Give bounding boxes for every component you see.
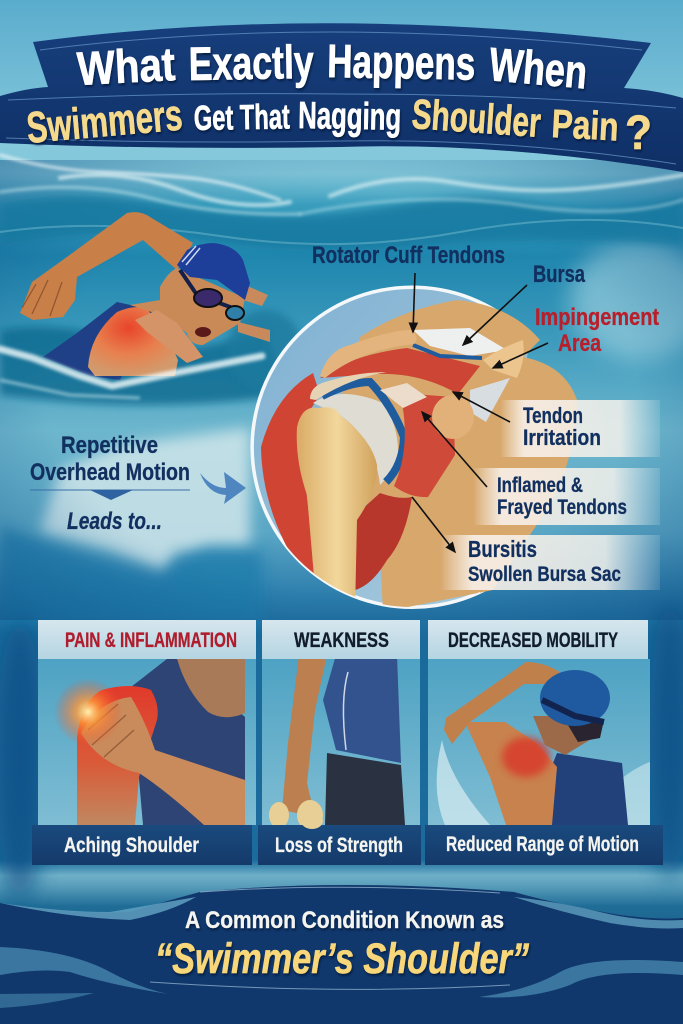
cap stripes: [182, 246, 200, 265]
deltoid muscle: [261, 373, 318, 575]
bottom subtitle: A Common Condition Known as: [185, 907, 504, 934]
title line 2: [25, 90, 652, 160]
redness: [502, 737, 550, 777]
lower acromion piece: [310, 372, 387, 400]
shorts: [325, 753, 405, 825]
anatomy circle: [252, 287, 577, 612]
header: [38, 620, 256, 659]
banner shape: [0, 885, 683, 1024]
title line 1: [76, 34, 589, 99]
humerus bone: [297, 407, 377, 612]
anatomy labels: Irritation: [523, 425, 601, 450]
white bursa tendons: [413, 328, 507, 356]
anatomy labels: Impingement: [535, 304, 659, 331]
panel: decreased mobility: DECREASED MOBILITY: [448, 629, 618, 652]
supraspinatus muscle: [320, 348, 480, 394]
repetitive motion note: Leads to...: [67, 508, 162, 535]
face: [130, 268, 245, 345]
swim cap: [177, 243, 250, 300]
pointer arrows: [412, 273, 548, 552]
panel: weakness: Loss of Strength: [275, 834, 403, 857]
anatomy labels: Swollen Bursa Sac: [468, 563, 621, 586]
forearm and hand: [81, 697, 245, 825]
title line 1: What: [76, 37, 177, 95]
pain glow: [56, 680, 118, 744]
panel: pain and inflammation: Aching Shoulder: [64, 834, 199, 857]
suit: [43, 302, 153, 380]
arrow to anatomy: [200, 472, 246, 504]
anatomy labels: Inflamed &: [497, 474, 583, 497]
far arm: [238, 285, 270, 342]
scapula and acromion bone: [340, 300, 577, 612]
title line 2: ?: [625, 107, 652, 160]
anatomy labels: Bursa: [533, 261, 585, 288]
humerus head cartilage: [313, 394, 398, 485]
red shoulder arm: [77, 686, 158, 825]
red inflamed tendon: [394, 393, 455, 497]
acromion tip: [483, 340, 524, 378]
light wave ribbons: [0, 897, 196, 920]
foam: [0, 349, 262, 386]
anatomy labels: [312, 242, 659, 586]
title banner: [0, 23, 683, 172]
coracoid: [432, 395, 474, 439]
arm: [282, 655, 327, 817]
dumbbell: [269, 802, 289, 825]
fingers: [22, 280, 62, 316]
anatomy labels: Frayed Tendons: [497, 496, 627, 519]
panel: decreased mobility: [425, 620, 663, 865]
title line 2: Shoulder: [410, 90, 542, 146]
water splash: [437, 740, 490, 825]
title line 2: Pain: [551, 102, 620, 149]
goggles: [180, 270, 244, 312]
blue tendon band: [322, 382, 404, 482]
title line 1: Happens: [327, 34, 476, 90]
anatomy labels: Bursitis: [468, 536, 537, 562]
anatomy labels: Tendon: [523, 403, 583, 428]
shoulder joint illustration: [261, 300, 577, 612]
head: [533, 716, 600, 755]
panel: pain and inflammation: [32, 620, 256, 865]
panel: weakness: [258, 620, 421, 865]
upper arm and back: [465, 722, 557, 825]
title line 2: Swimmers: [25, 91, 184, 153]
tank top: [131, 655, 245, 825]
repetitive motion note: Overhead Motion: [30, 459, 190, 486]
bottom banner: [0, 885, 683, 1024]
raised arm: [20, 212, 193, 320]
anatomy labels: Area: [558, 330, 602, 357]
anatomy labels: Rotator Cuff Tendons: [312, 242, 505, 269]
clavicle: [320, 330, 417, 378]
title line 2: Nagging: [298, 95, 402, 139]
caption: [32, 825, 252, 865]
title line 2: Get That: [193, 97, 290, 138]
dumbbell overlap: [301, 813, 323, 829]
condition name: “Swimmer’s Shoulder”: [155, 935, 529, 983]
tank top: [323, 655, 401, 763]
swimmer illustration: [0, 212, 303, 405]
panel: pain and inflammation: PAIN & INFLAMMATION: [65, 629, 237, 652]
blue bursa line: [413, 345, 482, 358]
hair: [568, 722, 603, 742]
title line 1: Exactly: [188, 35, 314, 90]
hand on shoulder: [135, 310, 203, 363]
label plates: [440, 400, 660, 590]
neck: [176, 655, 245, 717]
mouth: [195, 327, 211, 337]
swim cap: [540, 670, 610, 726]
frayed striped tendon: [380, 383, 427, 408]
repetitive motion note: Repetitive: [61, 432, 158, 459]
fingers: [88, 704, 134, 757]
banner ribbon shape: [0, 23, 683, 172]
red shoulder: [88, 307, 178, 376]
rear red muscle: [350, 493, 412, 590]
forearm: [444, 662, 561, 744]
repetitive motion note: [30, 432, 190, 535]
title line 1: When: [487, 37, 589, 99]
water surface waves and foam: [0, 155, 683, 249]
tank top: [552, 753, 628, 825]
panel: weakness: WEAKNESS: [294, 629, 389, 652]
dark water around swimmer: [0, 327, 290, 405]
